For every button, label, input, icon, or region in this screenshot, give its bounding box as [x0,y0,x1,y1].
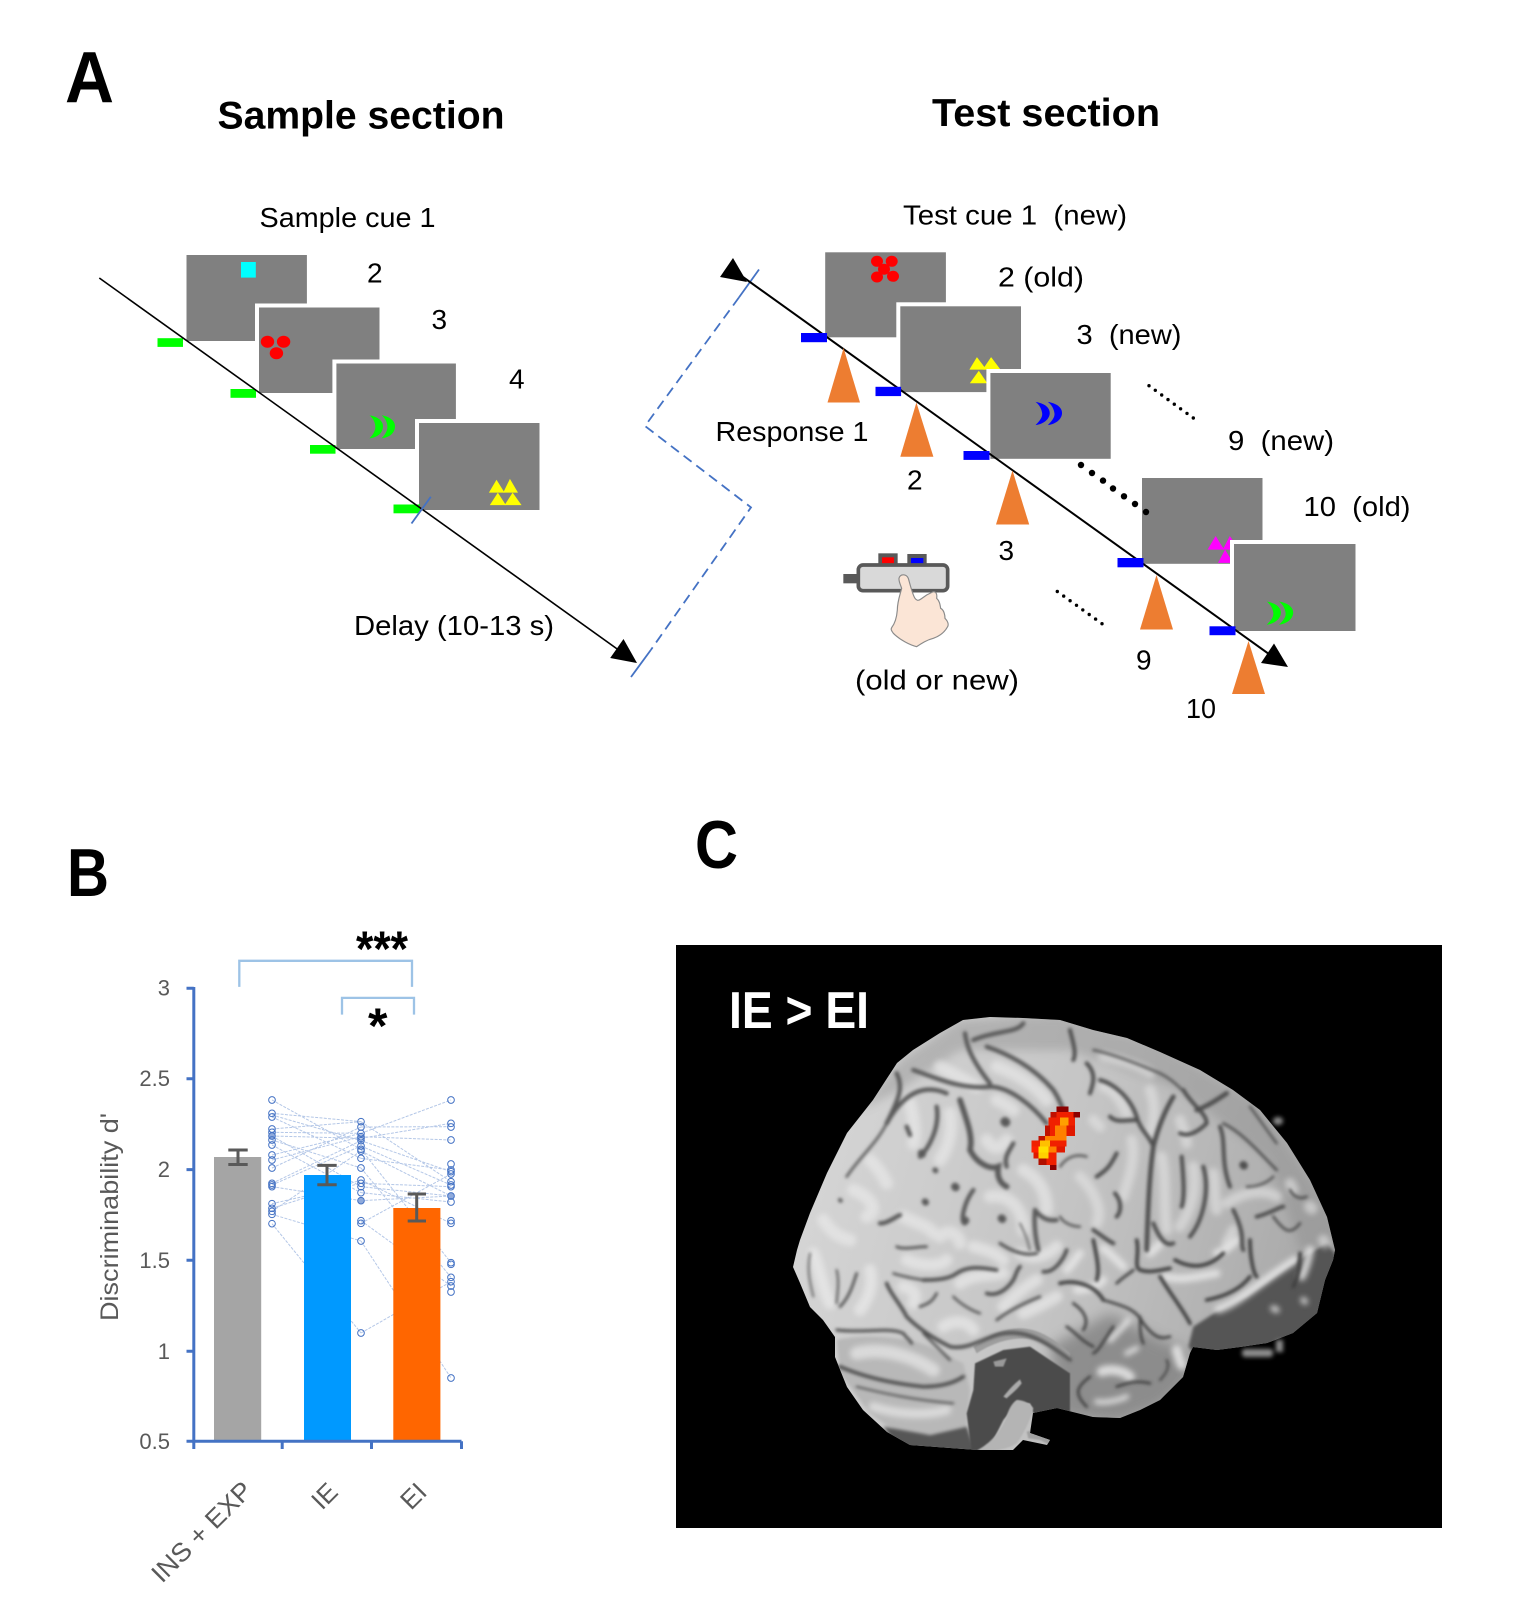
x label: INS + EXP: INS + EXP [145,1475,258,1588]
test screen 10 [1230,540,1360,635]
panel letter C: C [695,807,738,883]
label: Sample cue 1: Sample cue 1 [260,202,436,233]
label: Response 1: Response 1 [716,416,868,447]
y axis tick labels: 3 [158,976,170,1000]
panel C: brain activation [676,807,1442,1528]
cue: red circles [261,336,290,359]
response markers [828,348,1265,694]
ellipsis dots: large [1078,462,1149,515]
label: response 3: 3 [998,535,1014,566]
label: 2 (old): 2 (old) [998,261,1084,292]
y axis title: Discriminability d' [96,1113,124,1321]
cue: blue crescents [1036,402,1062,425]
significance stars ***: *** [356,921,408,977]
y axis tick labels: 1 [158,1339,170,1364]
small detached fragments [1242,1117,1283,1357]
x label: EI: EI [394,1477,433,1515]
label: old or new: (old or new) [855,664,1019,696]
bar: INS + EXP [214,1157,261,1441]
cue: yellow triangles [969,357,1001,383]
sample time arrow [99,278,637,663]
cue: magenta triangles [1208,536,1239,563]
subject data points [269,1097,454,1381]
test time arrow [720,258,1288,667]
heading: Sample section: Sample section [218,94,504,138]
icon: hand pressing response box [843,553,948,647]
y axis tick labels: 2 [158,1157,170,1182]
ellipsis dots: lower [1056,590,1104,625]
label: 4: 4 [509,364,525,394]
contrast label: IE > EI [729,982,869,1040]
brain highlights: gyri [813,1057,1325,1414]
label: response 9: 9 [1136,644,1152,676]
cue: red circles [871,256,899,282]
test screens [825,252,1025,396]
panel letter A: A [65,38,114,118]
black image background [676,945,1442,1528]
brain rendering [793,1015,1345,1453]
significance bracket: IE vs EI [342,998,414,1015]
cue: cyan square [241,262,256,278]
label: 9 (new): 9 (new) [1228,425,1334,456]
test screen 9 [1142,478,1262,564]
y axis tick labels: 0.5 [139,1429,170,1454]
significance star *: * [368,998,388,1054]
sample section timeline [99,202,637,663]
panel letter B: B [67,835,109,911]
y axis tick labels [139,976,170,1454]
chart axes [186,987,462,1449]
significance bracket: INS + EXP vs EI [239,961,412,987]
label: Test cue 1 (new): Test cue 1 (new) [903,200,1127,230]
delay connector: dashed zigzag [412,270,759,677]
y axis tick labels: 1.5 [139,1248,170,1273]
bar: IE [304,1175,351,1441]
label: response 2: 2 [907,464,923,496]
test screen 3 [986,369,1115,463]
sample screens [186,255,544,514]
brain sulci [809,1023,1307,1407]
cue: yellow triangles [489,479,522,505]
test section timeline [716,200,1410,724]
label: 3 (new): 3 (new) [1076,319,1182,350]
activation cluster [1032,1107,1080,1170]
sample onset markers [158,338,420,513]
y axis tick labels: 2.5 [139,1066,170,1091]
label: delay: Delay (10-13 s) [354,610,554,641]
cue: green crescents [369,415,395,438]
brain shading [837,1015,1345,1453]
x label: IE: IE [305,1477,344,1515]
label: 3: 3 [432,304,447,335]
bar: EI [393,1208,440,1441]
label: 2: 2 [367,258,383,288]
label: response 10: 10 [1186,693,1216,724]
panel A: task design [65,38,1410,724]
test onset markers [801,333,1236,635]
label: 10 (old): 10 (old) [1304,491,1410,522]
heading: Test section: Test section [932,92,1160,135]
error bars [228,1150,426,1221]
subject connecting lines [272,1100,451,1378]
panel B: discriminability bar chart [67,835,462,1588]
cue: green crescents [1267,601,1293,625]
ellipsis dots: upper [1147,384,1195,420]
